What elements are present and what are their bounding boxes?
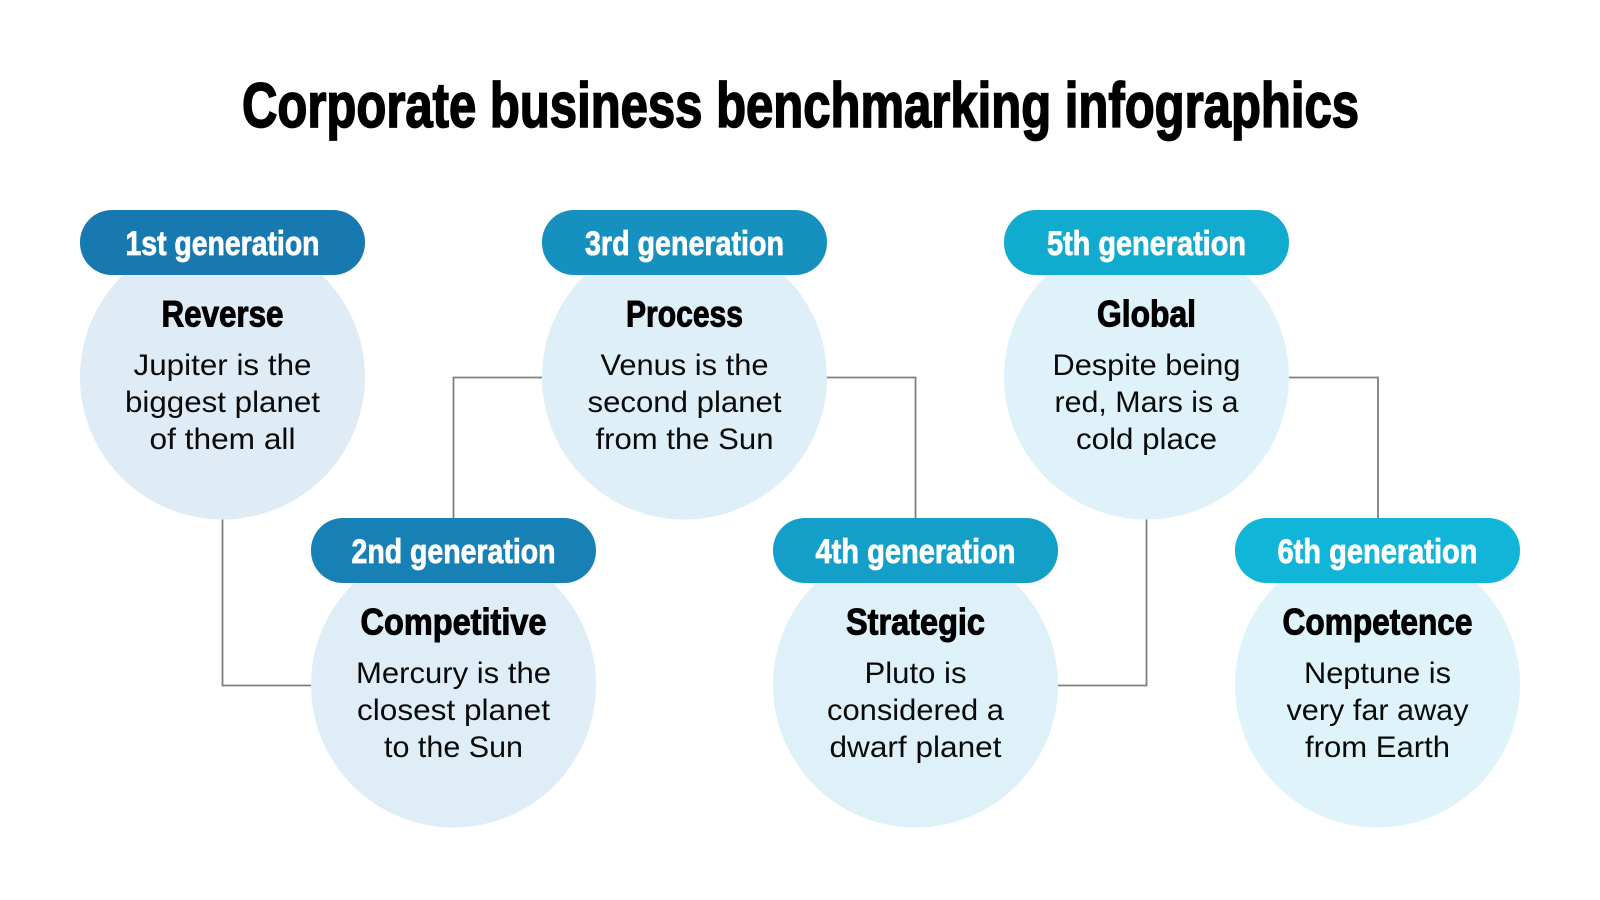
pill [1004,210,1289,275]
heading: Competitive [360,602,546,642]
pill label: 4th generation [816,533,1016,571]
body text [1052,349,1240,456]
pill [80,210,365,275]
circle [1004,234,1289,520]
body text [827,657,1004,764]
pill label: 5th generation [1047,225,1246,263]
body text: dwarf planet [830,731,1002,764]
body text: to the Sun [384,731,523,764]
heading: Global [1097,294,1196,334]
circle [80,234,365,520]
connector: 1st to 2nd generation [222,515,315,686]
body text [588,349,782,456]
body text: closest planet [357,694,551,727]
node: 1st generation Reverse [80,210,365,520]
body text: very far away [1286,694,1468,727]
body text: Mercury is the [356,657,551,690]
circle [311,542,596,828]
heading: Process [626,294,743,334]
pill label: 1st generation [126,225,320,263]
body text: Pluto is [864,657,966,690]
body text: red, Mars is a [1054,386,1239,419]
body text: Neptune is [1304,657,1451,690]
body text: of them all [150,423,296,456]
body text: Venus is the [600,349,768,382]
body text: from Earth [1305,731,1450,764]
connector: 2nd to 3rd generation [454,378,546,522]
body text [125,349,321,456]
node: 5th generation Global [1004,210,1289,520]
pill label: 2nd generation [352,533,556,571]
body text: considered a [827,694,1004,727]
node: 2nd generation Competitive [311,518,596,828]
connector: 3rd to 4th generation [823,378,916,522]
heading: Strategic [846,602,985,642]
circle [542,234,827,520]
circle [1235,542,1520,828]
pill [542,210,827,275]
pill label: 6th generation [1278,533,1478,571]
body text: biggest planet [125,386,321,419]
node: 4th generation Strategic [773,518,1058,828]
body text: from the Sun [596,423,774,456]
body text [356,657,551,764]
body text: Jupiter is the [134,349,312,382]
pill [311,518,596,583]
pill label: 3rd generation [585,225,784,263]
body text: cold place [1076,423,1217,456]
node: 3rd generation Process [542,210,827,520]
body text: Despite being [1052,349,1240,382]
heading: Competence [1282,602,1472,642]
body text: second planet [588,386,782,419]
heading: Reverse [162,294,284,334]
pill [1235,518,1520,583]
connector: 5th to 6th generation [1284,378,1378,522]
pill [773,518,1058,583]
body text [1286,657,1468,764]
circle [773,542,1058,828]
connector: 4th to 5th generation [1053,515,1146,686]
node: 6th generation Competence [1235,518,1520,828]
